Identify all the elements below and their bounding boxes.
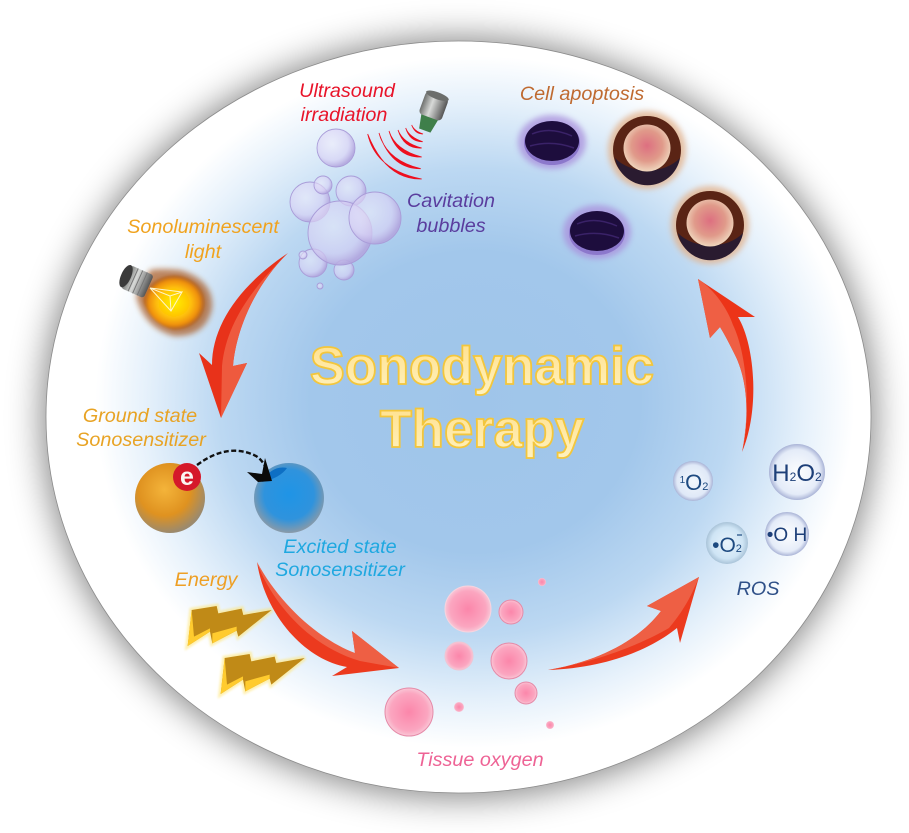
label: Ultrasound irradiation: irradiation [301, 104, 387, 126]
hydroxyl bubble: •O H [767, 525, 807, 546]
hydrogen peroxide bubble [769, 444, 825, 500]
label: Tissue oxygen: Tissue oxygen [416, 749, 544, 771]
label: Excited state Sonosensitizer: Sonosensitizer [275, 559, 406, 581]
purple cell bottom [563, 205, 631, 259]
brown cell top [608, 111, 686, 189]
label: Excited state Sonosensitizer: Excited state [283, 536, 397, 558]
singlet oxygen bubble: O [685, 470, 702, 495]
label: Sonoluminescent light: Sonoluminescent [127, 216, 279, 238]
label: Cell apoptosis: Cell apoptosis [520, 83, 644, 105]
icon: lightning bolts [188, 606, 305, 694]
arrow: tissue oxygen to ROS [548, 577, 699, 670]
singlet oxygen bubble [673, 461, 713, 501]
ground state sphere with electron [135, 463, 205, 533]
label: ROS: ROS [737, 578, 779, 600]
label: Ground state Sonosensitizer: Ground state [83, 405, 197, 427]
superoxide bubble [706, 522, 748, 564]
brown cell bottom [671, 186, 749, 264]
singlet oxygen bubble: 1 [680, 475, 686, 486]
label: Ultrasound irradiation: Ultrasound [299, 80, 395, 102]
dashed transfer arrow [197, 451, 272, 482]
hydrogen peroxide bubble: H2O2 [772, 460, 822, 487]
ROS bubbles [673, 444, 825, 564]
title: Sonodynamic Therapy: Therapy [380, 400, 584, 459]
arrow: light to ground state [199, 253, 288, 418]
icon: ultrasound transducer [414, 88, 450, 135]
excited state sphere [254, 463, 324, 533]
ultrasound waves [368, 125, 423, 179]
title: Sonodynamic Therapy [310, 337, 654, 459]
tissue oxygen bubbles [385, 578, 554, 736]
label: Ground state Sonosensitizer: Sonosensitizer [76, 429, 207, 451]
arrow: excited state to tissue oxygen [257, 562, 399, 676]
label: Cavitation bubbles: Cavitation [407, 190, 495, 212]
cells: apoptotic [518, 111, 749, 264]
hydroxyl bubble [765, 512, 809, 556]
icon: light bulb [116, 263, 212, 336]
title: Sonodynamic Therapy: Sonodynamic [310, 337, 654, 396]
label: Energy: Energy [175, 569, 238, 591]
arrow: ROS to cell apoptosis [698, 279, 755, 452]
purple cell top [518, 115, 586, 169]
superoxide bubble: •O2 [712, 534, 742, 557]
label: Cavitation bubbles: bubbles [416, 215, 486, 237]
cavitation bubbles [290, 129, 401, 289]
label: Sonoluminescent light: light [185, 241, 223, 263]
singlet oxygen bubble: 2 [702, 481, 708, 493]
ground state sphere with electron: e [180, 463, 194, 491]
